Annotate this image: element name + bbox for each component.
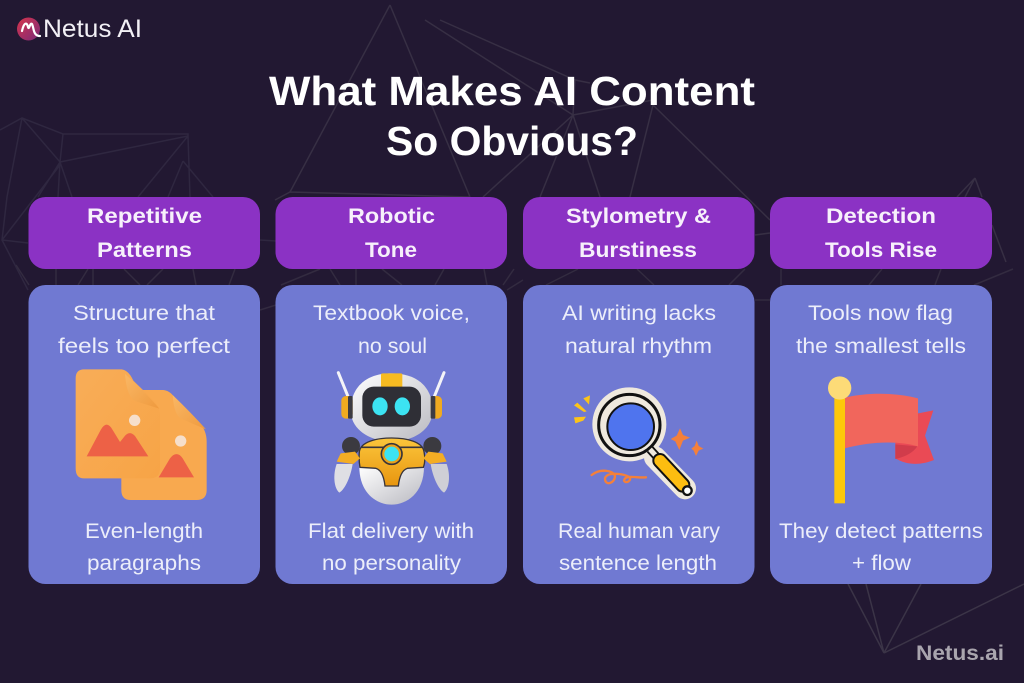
column: Repetitive Patterns: [28, 197, 260, 584]
text: Flat delivery with no personality: no personality: [322, 552, 462, 575]
text: AI writing lacks natural rhythm: [562, 302, 716, 358]
title: So Obvious?: [386, 118, 638, 164]
column: Robotic Tone: [276, 197, 507, 584]
text: Structure that feels too perfect: [58, 302, 230, 358]
icon: magnifying glass: [574, 387, 703, 495]
logo mark: [17, 18, 40, 40]
text: Even-length paragraphs: Even-length: [85, 520, 203, 543]
text: Textbook voice, no soul: [313, 302, 470, 358]
text: Structure that feels too perfect: feels too perfect: [58, 335, 230, 358]
header: Repetitive Patterns: Repetitive: [87, 205, 202, 228]
panel: Stylometry & Burstiness: [523, 285, 754, 584]
text: Tools now flag the smallest tells: the smallest tells: [796, 335, 966, 358]
header: Robotic Tone: [276, 197, 507, 269]
panel: Robotic Tone: [276, 285, 507, 584]
text: Flat delivery with no personality: [308, 520, 474, 575]
text: AI writing lacks natural rhythm: natural rhythm: [565, 335, 712, 358]
text: Tools now flag the smallest tells: Tools now flag: [808, 302, 953, 325]
text: They detect patterns + flow: + flow: [852, 552, 912, 575]
text: Real human vary sentence length: [558, 520, 721, 575]
text: Real human vary sentence length: Real human vary: [558, 520, 721, 543]
header: Detection Tools Rise: Detection: [826, 205, 936, 228]
header: Robotic Tone: Tone: [365, 239, 417, 262]
text: Real human vary sentence length: sentence length: [559, 552, 717, 575]
panel: Detection Tools Rise: [770, 285, 992, 584]
logo: Netus AI: [17, 15, 142, 43]
header: Stylometry & Burstiness: Stylometry &: [566, 205, 711, 228]
header: Robotic Tone: Robotic: [348, 205, 435, 228]
text: AI writing lacks natural rhythm: AI writing lacks: [562, 302, 716, 325]
text: Even-length paragraphs: paragraphs: [87, 552, 201, 575]
panel: Repetitive Patterns: [28, 285, 260, 584]
title: What Makes AI Content: [269, 68, 755, 114]
text: Tools now flag the smallest tells: [796, 302, 966, 358]
header: Detection Tools Rise: Tools Rise: [825, 239, 937, 262]
header: Stylometry & Burstiness: Burstiness: [579, 239, 697, 262]
icon: red flag: [828, 376, 934, 503]
text: Structure that feels too perfect: Structure that: [73, 302, 215, 325]
text: Flat delivery with no personality: Flat delivery with: [308, 520, 474, 543]
text: They detect patterns + flow: They detect patterns: [779, 520, 983, 543]
icon: image files: [76, 369, 207, 500]
logo wordmark: Netus AI: [43, 15, 142, 43]
header: Detection Tools Rise: [770, 197, 992, 269]
header: Repetitive Patterns: [28, 197, 260, 269]
text: Textbook voice, no soul: Textbook voice,: [313, 302, 470, 325]
text: Even-length paragraphs: [85, 520, 203, 575]
header: Repetitive Patterns: Patterns: [97, 239, 192, 262]
column: Stylometry & Burstiness: [523, 197, 754, 584]
icon: robot: [334, 373, 449, 505]
title: [269, 68, 755, 164]
column: Detection Tools Rise: [770, 197, 992, 584]
header: Stylometry & Burstiness: [523, 197, 754, 269]
text: Textbook voice, no soul: no soul: [358, 335, 427, 358]
footer brand: Netus.ai: Netus.ai: [916, 642, 1004, 665]
text: They detect patterns + flow: [779, 520, 983, 575]
